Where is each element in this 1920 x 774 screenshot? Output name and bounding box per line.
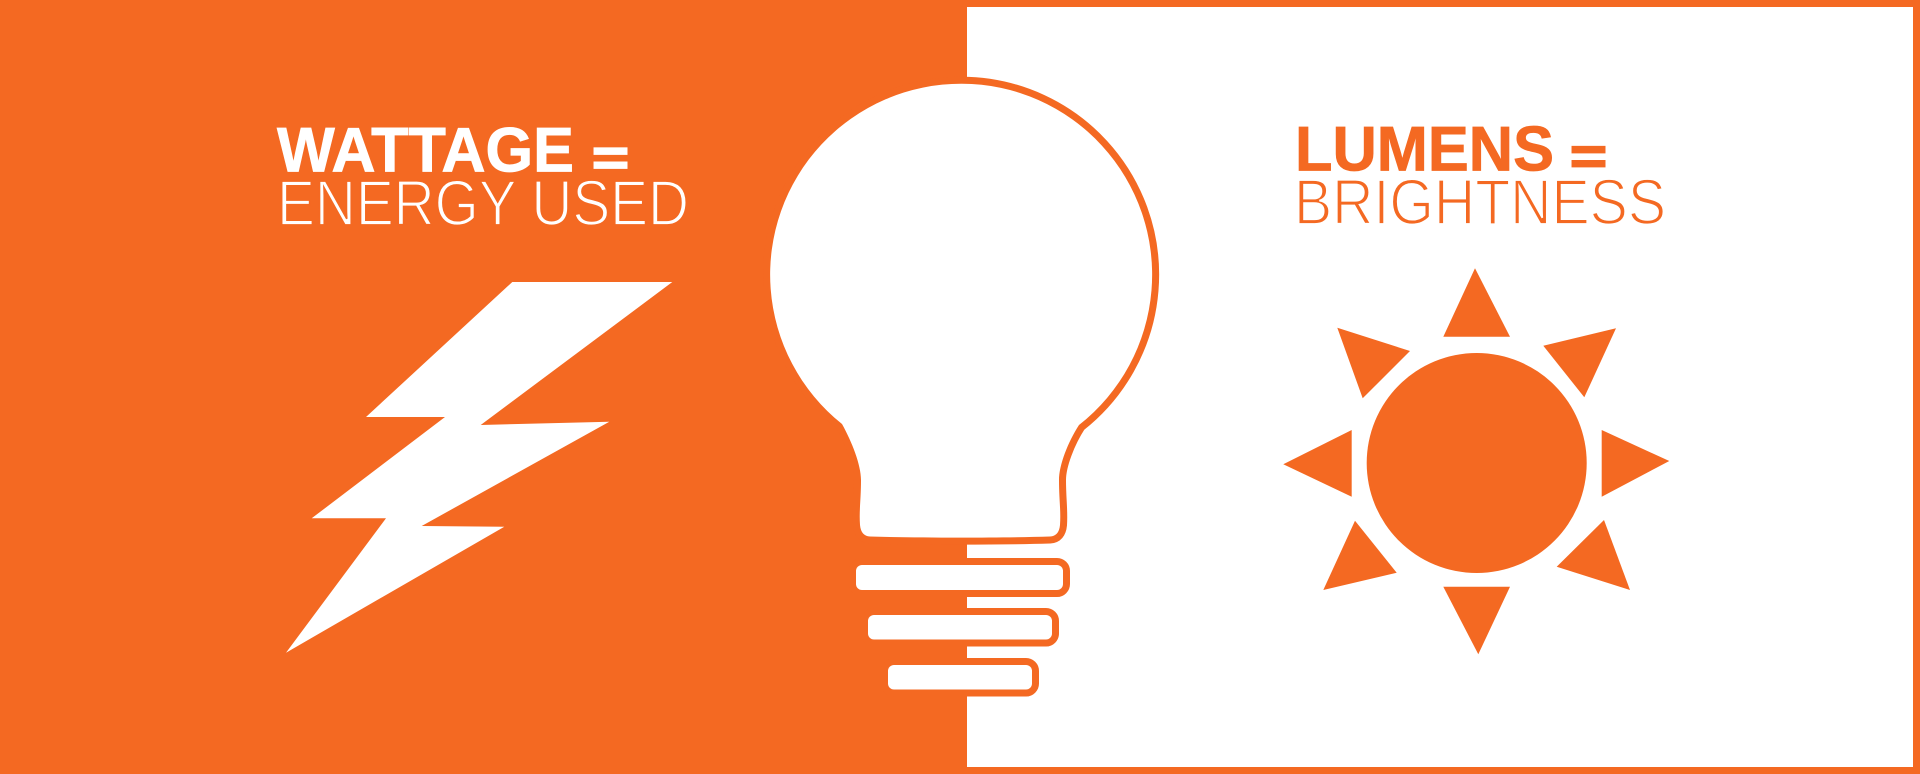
heading: lumens equals brightness xyxy=(1294,114,1666,238)
equals sign: wattage: = xyxy=(592,130,629,188)
heading: wattage equals energy used xyxy=(277,116,689,239)
panel: white right side xyxy=(967,7,1913,767)
sun disc xyxy=(1367,353,1587,573)
icon: light bulb xyxy=(770,84,1152,690)
bulb thread 3 xyxy=(888,665,1032,690)
sun rays xyxy=(1283,268,1669,654)
bulb glass xyxy=(770,84,1152,538)
icon: lightning bolt xyxy=(286,282,672,653)
subheading: BRIGHTNESS: BRIGHTNESS xyxy=(1294,166,1666,238)
equals sign: lumens: = xyxy=(1570,128,1607,186)
icon: sun xyxy=(1283,268,1669,654)
subheading: ENERGY USED: ENERGY USED xyxy=(277,167,689,239)
heading word: LUMENS: LUMENS xyxy=(1295,114,1554,184)
heading word: WATTAGE: WATTAGE xyxy=(277,116,574,186)
bulb thread 1 xyxy=(856,565,1063,590)
bulb thread 2 xyxy=(868,615,1052,640)
